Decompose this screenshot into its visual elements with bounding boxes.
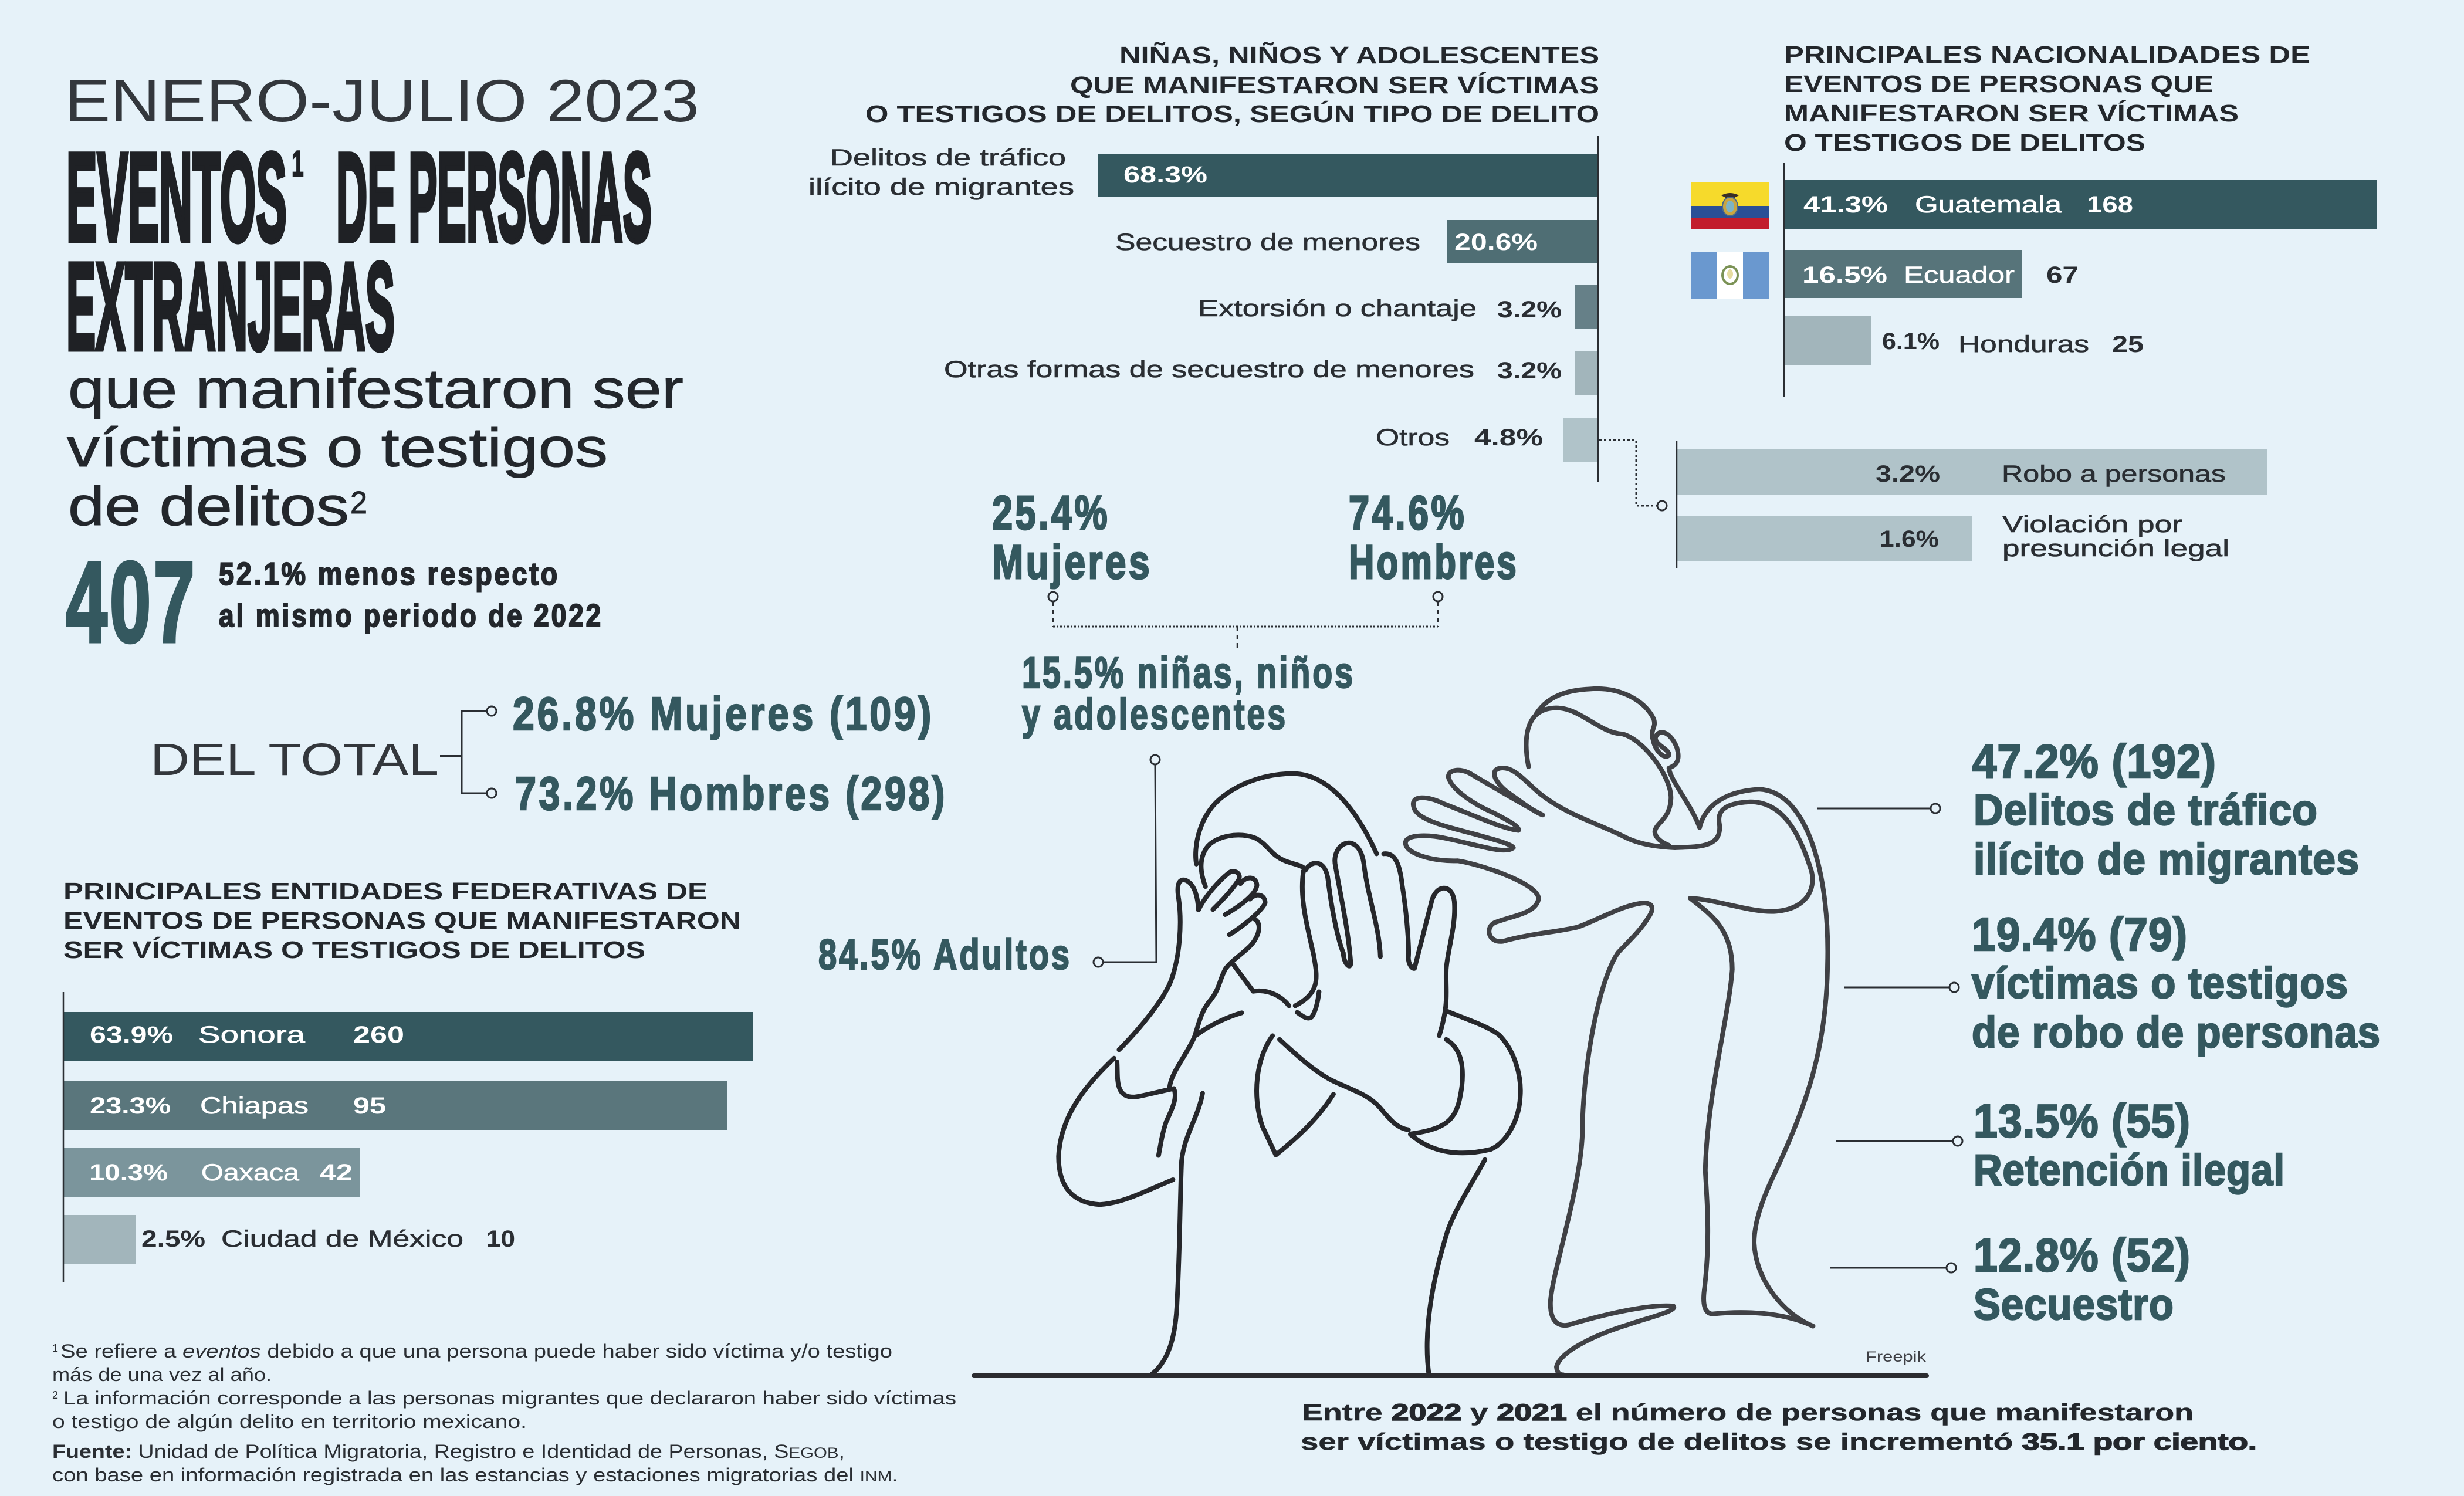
bar chart: nationalities: 25 [2112, 331, 2144, 357]
callout: robbery: 19.4% (79) [1972, 908, 2188, 960]
women minors: 25.4% [992, 486, 1110, 540]
bar chart: federal entities: 42 [320, 1160, 353, 1186]
del total label: DEL TOTAL [150, 735, 439, 785]
bar chart: otros detail: 1.6% [1880, 526, 1939, 552]
closing statement: ser víctimas o testigo de delitos se incrementó 35.1 por ciento. [1301, 1429, 2257, 1455]
figure: person covering face [1058, 774, 1521, 1375]
bar chart: federal entities: 23.3% [90, 1093, 171, 1119]
bar chart: otros detail [1677, 441, 2267, 568]
bar chart: federal entities: 95 [353, 1093, 386, 1119]
del total breakdown [150, 688, 947, 820]
callout: robbery [1844, 908, 2381, 1057]
footnotes and source: más de una vez al año. [52, 1364, 272, 1385]
callout: migrant trafficking: Delitos de tráfico [1974, 786, 2318, 834]
panel: federal entities [63, 878, 753, 1282]
title: subheading [67, 358, 683, 537]
heading: nationalities: MANIFESTARON SER VÍCTIMAS [1784, 100, 2239, 127]
footnotes and source: Se refiere a eventos debido a que una persona puede haber sido víctima y/o testigo [60, 1341, 892, 1362]
bracket connector [440, 706, 496, 798]
bar chart: crime types: 20.6% [1454, 229, 1538, 255]
bar chart: federal entities: 10.3% [89, 1160, 168, 1186]
bar chart: nationalities: Guatemala [1915, 192, 2062, 218]
big number 407: 407 [66, 538, 197, 666]
bar chart: otros detail: Robo a personas [2002, 461, 2226, 487]
title: main heading: EXTRANJERAS [66, 237, 395, 375]
minors by sex callout [992, 486, 1519, 739]
men minors: 74.6% [1349, 486, 1467, 540]
closing statement [1301, 1400, 2257, 1455]
heading: nationalities: O TESTIGOS DE DELITOS [1784, 129, 2145, 156]
bar chart: crime types: Otros [1376, 425, 1450, 451]
bar chart: nationalities: 168 [2087, 192, 2133, 218]
figure: person with raised hand [1406, 689, 1827, 1375]
callout: robbery: de robo de personas [1972, 1008, 2381, 1057]
icon: flag of Guatemala [1691, 252, 1769, 299]
dotted bracket [1048, 592, 1443, 649]
bar chart: crime types: Delitos de tráfico [830, 145, 1066, 171]
comparison text: 52.1% menos respecto [219, 556, 560, 592]
footnotes and source: 2 [52, 1389, 58, 1401]
bar chart: nationalities: 6.1% [1882, 329, 1940, 354]
bar chart: crime types: 3.2% [1497, 358, 1562, 384]
bar chart: crime types [808, 136, 1598, 482]
men minors [1349, 486, 1519, 589]
credit: Freepik: Freepik [1866, 1349, 1927, 1365]
heading: minors by crime [865, 42, 1599, 127]
callout: illegal detention [1836, 1095, 2285, 1194]
panel: nationalities [1691, 41, 2377, 397]
adults connector [1094, 755, 1160, 967]
callout: migrant trafficking [1817, 735, 2360, 884]
dotted connector to otros detail [1599, 440, 1667, 510]
men minors: Hombres [1349, 536, 1519, 589]
heading: minors by crime: QUE MANIFESTARON SER VÍCTIMAS [1070, 72, 1599, 99]
bar chart: otros detail: 3.2% [1876, 461, 1940, 487]
heading: nationalities: EVENTOS DE PERSONAS QUE [1784, 70, 2213, 97]
comparison text: al mismo periodo de 2022 [219, 597, 603, 634]
bar chart: federal entities: 260 [353, 1022, 404, 1048]
illustration: line art of victim and aggressor [974, 689, 1927, 1376]
bar chart: nationalities: Honduras [1958, 331, 2089, 357]
bar chart: crime types: Secuestro de menores [1115, 229, 1420, 255]
bar chart: nationalities: Ecuador [1904, 262, 2015, 288]
bar chart: federal entities: 2.5% [141, 1226, 205, 1252]
bar chart: crime types: ilícito de migrantes [808, 174, 1074, 200]
bar chart: federal entities: Ciudad de México [221, 1226, 463, 1252]
bar chart: federal entities: 10 [486, 1226, 515, 1252]
bar chart: otros detail: presunción legal [2002, 536, 2229, 561]
ground line [974, 1373, 1927, 1378]
callout: kidnapping [1830, 1229, 2191, 1329]
title block [65, 67, 699, 537]
comparison text [219, 556, 603, 634]
closing statement: Entre 2022 y 2021 el número de personas que manifestaron [1302, 1400, 2194, 1426]
callout: illegal detention: Retención ilegal [1974, 1146, 2285, 1194]
text: DE PERSONAS [336, 127, 652, 268]
bar chart: nationalities: 16.5% [1802, 262, 1887, 288]
total events callout [66, 538, 603, 666]
bar chart: federal entities [63, 992, 753, 1282]
footnotes and source: con base en información registrada en las estancias y estaciones migratorias del INM . [52, 1464, 898, 1485]
callout: illegal detention: 13.5% (55) [1974, 1095, 2191, 1147]
callout: robbery: víctimas o testigos [1972, 959, 2348, 1007]
footnotes and source: o testigo de algún delito en territorio mexicano. [52, 1411, 527, 1432]
panel: minors by crime type [808, 42, 2267, 568]
footnotes and source: Fuente: Unidad de Política Migratoria, Registro e Identidad de Personas, S EGOB , [52, 1441, 845, 1462]
title: subheading: víctimas o testigos [67, 417, 608, 478]
callout: kidnapping: 12.8% (52) [1974, 1229, 2191, 1281]
bar chart: nationalities: 41.3% [1803, 192, 1888, 218]
heading: minors by crime: O TESTIGOS DE DELITOS, SEGÚN TIPO DE DELITO [865, 100, 1599, 127]
bar chart: nationalities: 67 [2046, 262, 2079, 288]
bar chart: crime types: Extorsión o chantaje [1198, 296, 1477, 321]
heading: minors by crime: NIÑAS, NIÑOS Y ADOLESCENTES [1119, 42, 1599, 69]
bar chart: federal entities: Chiapas [200, 1093, 309, 1119]
minors share: 15.5% niñas, niños [1022, 648, 1355, 697]
heading: nationalities [1784, 41, 2310, 156]
bar chart: otros detail: Violación por [2002, 512, 2182, 537]
title: subheading: de delitos [68, 475, 349, 537]
title: subheading: que manifestaron ser [68, 358, 683, 419]
minors share: y adolescentes [1022, 690, 1288, 739]
footnotes and source: La información corresponde a las personas migrantes que declararon haber sido víctimas [63, 1387, 956, 1409]
title: subheading: 2 [350, 485, 367, 520]
title: period: ENERO-JULIO 2023 [65, 67, 699, 134]
women minors: Mujeres [992, 536, 1152, 589]
heading: federal entities: PRINCIPALES ENTIDADES FEDERATIVAS DE [63, 878, 708, 905]
bar chart: federal entities: 63.9% [90, 1022, 173, 1048]
title: main heading: EVENTOS [66, 127, 287, 268]
bar chart: crime types: Otras formas de secuestro de menores [944, 357, 1474, 383]
heading: federal entities [63, 878, 741, 963]
heading: federal entities: SER VÍCTIMAS O TESTIGOS DE DELITOS [63, 936, 645, 963]
adults callout [818, 755, 1160, 979]
minors share [1022, 648, 1355, 739]
bar chart: crime types: 3.2% [1497, 297, 1562, 323]
bar chart: nationalities [1784, 163, 2377, 397]
footnotes and source [52, 1341, 956, 1485]
title: main heading: 1 [292, 144, 304, 184]
bar chart: crime types: 68.3% [1123, 162, 1207, 188]
adults share: 84.5% Adultos [818, 932, 1072, 979]
callout: migrant trafficking: ilícito de migrantes [1974, 835, 2360, 884]
bar chart: federal entities: Oaxaca [201, 1160, 300, 1186]
heading: nationalities: PRINCIPALES NACIONALIDADES DE [1784, 41, 2310, 68]
heading: federal entities: EVENTOS DE PERSONAS QUE MANIFESTARON [63, 907, 741, 934]
footnotes and source: 1 [52, 1342, 58, 1354]
icon: flag of Ecuador [1691, 182, 1769, 229]
bar chart: federal entities: Sonora [198, 1022, 306, 1048]
women and men totals: 73.2% Hombres (298) [515, 767, 947, 820]
title: main heading [66, 127, 652, 375]
women and men totals [513, 688, 947, 820]
callout: kidnapping: Secuestro [1974, 1280, 2174, 1329]
bar chart: crime types: 4.8% [1474, 425, 1543, 451]
callout: migrant trafficking: 47.2% (192) [1972, 735, 2216, 787]
women minors [992, 486, 1152, 589]
women and men totals: 26.8% Mujeres (109) [513, 688, 934, 740]
callouts: crime types [1817, 735, 2381, 1329]
